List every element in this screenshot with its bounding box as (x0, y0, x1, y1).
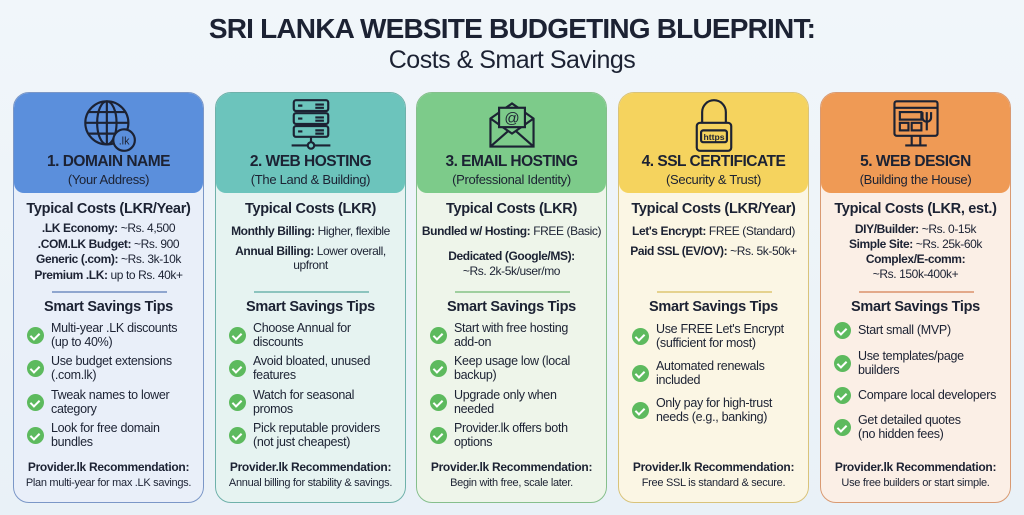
panel: ssl: Free SSL is standard & secure. (642, 477, 785, 489)
panel: web design: (no hidden fees) (858, 427, 944, 441)
panel: web design: DIY/Builder: ~Rs. 0-15k (855, 222, 976, 236)
header: hosting: (The Land & Building) (251, 172, 370, 187)
panel: web design: Get detailed quotes (858, 413, 961, 427)
panel: web design: builders (858, 363, 899, 377)
title: SRI LANKA WEBSITE BUDGETING BLUEPRINT: (209, 13, 815, 44)
panel: web hosting: Avoid bloated, unused (253, 354, 370, 368)
panel: web design: Use templates/page (858, 349, 964, 363)
panel: web hosting: features (253, 368, 296, 382)
panel: email hosting: needed (454, 402, 494, 416)
icon: envelope: @ (504, 110, 520, 127)
panel: domain name: .LK Economy: ~Rs. 4,500 (42, 221, 175, 235)
panel: ssl: (sufficient for most) (656, 336, 756, 350)
icon: globe (84, 100, 136, 152)
panel: ssl: Paid SSL (EV/OV): ~Rs. 5k-50k+ (630, 244, 797, 258)
header: hosting: 2. WEB HOSTING (250, 153, 371, 170)
panel: ssl: Use FREE Let's Encrypt (656, 322, 784, 336)
panel: web hosting: Monthly Billing: Higher, flexible (231, 224, 390, 238)
panel: domain name: Use budget extensions (51, 354, 172, 368)
panel: ssl (618, 92, 809, 503)
header: domain (14, 93, 203, 193)
tips: ssl: Smart Savings Tips (649, 299, 778, 315)
panel: web design: Compare local developers (858, 388, 996, 402)
panel: web hosting: Annual billing for stability & savings. (229, 477, 392, 489)
recommendation: domain: Provider.lk Recommendation: (28, 460, 189, 474)
panel: web design: ~Rs. 150k-400k+ (873, 267, 958, 281)
panel: domain name: bundles (51, 435, 93, 449)
header: design (821, 93, 1010, 193)
header: domain: (Your Address) (68, 172, 149, 187)
header: domain: 1. DOMAIN NAME (47, 153, 170, 170)
costs: hosting: Typical Costs (LKR) (245, 201, 376, 217)
panel: domain name: category (51, 402, 97, 416)
panel: web hosting: upfront (293, 258, 328, 272)
header: email: 3. EMAIL HOSTING (445, 153, 578, 170)
panel: web hosting: Annual Billing: Lower overall, (235, 244, 386, 258)
header: ssl: (Security & Trust) (666, 172, 761, 187)
icon: server (292, 99, 330, 150)
header: ssl (619, 93, 808, 193)
header: email: (Professional Identity) (452, 172, 571, 187)
tips: email: Smart Savings Tips (447, 299, 576, 315)
panel: email hosting: Provider.lk offers both (454, 421, 568, 435)
panel: ssl: needs (e.g., banking) (656, 410, 767, 424)
header: ssl: 4. SSL CERTIFICATE (642, 153, 785, 170)
panel: domain name (13, 92, 204, 503)
panel: email hosting: Upgrade only when (454, 388, 557, 402)
icon: globe: .lk (119, 135, 130, 147)
panel: web hosting: (not just cheapest) (253, 435, 350, 449)
panel: email hosting: ~Rs. 2k-5k/user/mo (463, 264, 560, 278)
panel: email hosting: add-on (454, 335, 491, 349)
icon: padlock (696, 99, 732, 152)
icon: envelope (489, 102, 535, 148)
panel: web design: Simple Site: ~Rs. 25k-60k (849, 237, 982, 251)
tips: domain: Smart Savings Tips (44, 299, 173, 315)
panel: domain name: Tweak names to lower (51, 388, 169, 402)
header: design: (Building the House) (860, 172, 971, 187)
panel: email hosting (416, 92, 607, 503)
panel: domain name: .COM.LK Budget: ~Rs. 900 (38, 236, 179, 250)
panel: email hosting: Dedicated (Google/MS): (448, 249, 575, 263)
panel: email hosting: Keep usage low (local (454, 354, 570, 368)
panel: domain name: Multi-year .LK discounts (51, 321, 177, 335)
panel: ssl: Let's Encrypt: FREE (Standard) (632, 224, 795, 238)
recommendation: email: Provider.lk Recommendation: (431, 460, 592, 474)
panel: web design: Use free builders or start simple. (841, 477, 990, 489)
panel: domain name: Premium .LK: up to Rs. 40k+ (34, 268, 183, 282)
costs: design: Typical Costs (LKR, est.) (834, 201, 997, 217)
recommendation: ssl: Provider.lk Recommendation: (633, 460, 794, 474)
panel: domain name: (.com.lk) (51, 368, 96, 382)
recommendation: hosting: Provider.lk Recommendation: (230, 460, 391, 474)
icon: monitor (893, 100, 939, 146)
header: design: 5. WEB DESIGN (860, 153, 971, 170)
panel: email hosting: Begin with free, scale later. (450, 477, 573, 489)
panel: web hosting: promos (253, 402, 293, 416)
subtitle: Costs & Smart Savings (389, 46, 635, 74)
panel: web hosting (215, 92, 406, 503)
costs: domain: Typical Costs (LKR/Year) (26, 201, 191, 217)
costs: email: Typical Costs (LKR) (446, 201, 577, 217)
header: email (417, 93, 606, 193)
panel: ssl: Automated renewals (656, 359, 765, 373)
panel: email hosting: backup) (454, 368, 496, 382)
panel: web design: Start small (MVP) (858, 323, 951, 337)
panel: domain name: Generic (.com): ~Rs. 3k-10k (36, 252, 181, 266)
panel: web hosting: discounts (253, 335, 303, 349)
panel: ssl: included (656, 373, 700, 387)
tips: design: Smart Savings Tips (851, 299, 980, 315)
panel: web design (820, 92, 1011, 503)
panel: ssl: Only pay for high-trust (656, 396, 772, 410)
panel: domain name: (up to 40%) (51, 335, 112, 349)
costs: ssl: Typical Costs (LKR/Year) (631, 201, 796, 217)
panel: email hosting: Bundled w/ Hosting: FREE (Basic) (422, 224, 601, 238)
panel: domain name: Look for free domain (51, 421, 160, 435)
panel: email hosting: Start with free hosting (454, 321, 568, 335)
tips: hosting: Smart Savings Tips (246, 299, 375, 315)
panel: web hosting: Watch for seasonal (253, 388, 354, 402)
panel: web hosting: Choose Annual for (253, 321, 351, 335)
panel: email hosting: options (454, 435, 492, 449)
panel: web hosting: Pick reputable providers (253, 421, 380, 435)
panel: web design: Complex/E-comm: (866, 252, 965, 266)
header: hosting (216, 93, 405, 193)
panel: domain name: Plan multi-year for max .LK savings. (26, 477, 191, 489)
icon: padlock: https (703, 132, 725, 142)
recommendation: design: Provider.lk Recommendation: (835, 460, 996, 474)
